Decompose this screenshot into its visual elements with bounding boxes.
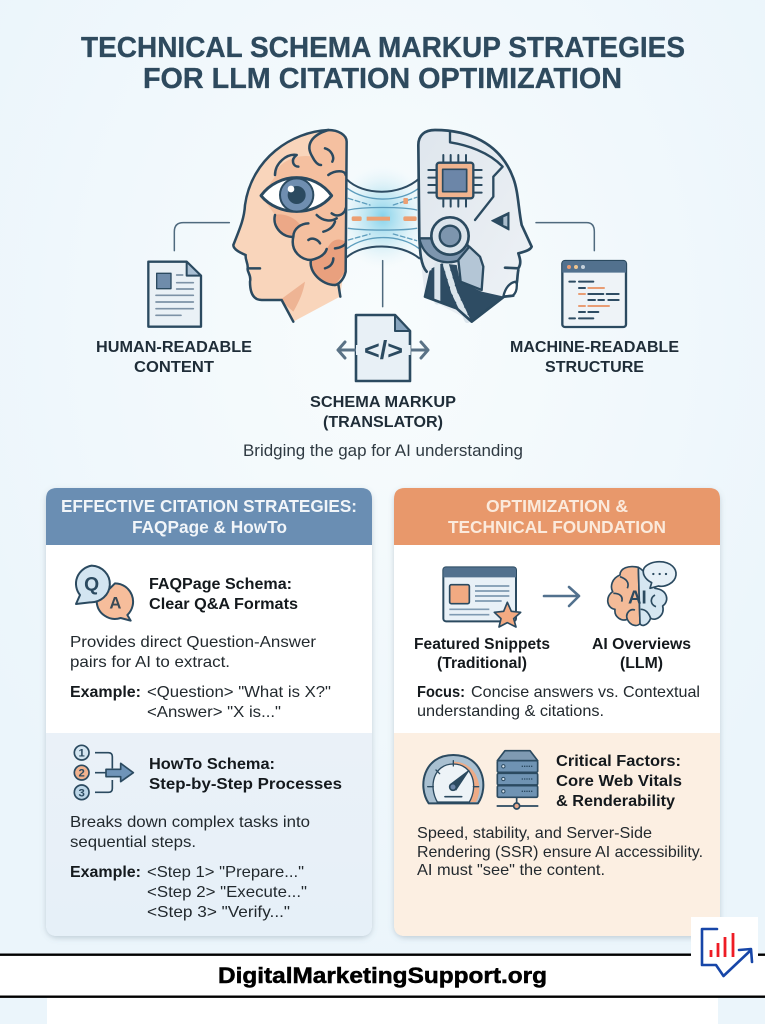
focus note: Focus: (417, 684, 465, 701)
icon: schema translator document (338, 315, 428, 381)
title: FOR LLM CITATION OPTIMIZATION (143, 63, 622, 95)
FAQPage example (70, 684, 331, 721)
title: TECHNICAL SCHEMA MARKUP STRATEGIES (81, 32, 685, 64)
icon: code browser window (562, 261, 626, 327)
comparison labels: AI Overviews (592, 636, 691, 653)
label: schema markup translator: SCHEMA MARKUP (310, 394, 456, 411)
human head (233, 130, 347, 322)
FAQPage example: Example: (70, 684, 141, 701)
comparison labels: Featured Snippets (414, 636, 550, 653)
focus note: understanding & citations. (417, 703, 604, 720)
panel header: citation strategies: FAQPage & HowTo (132, 517, 287, 537)
label: human-readable content (96, 339, 252, 376)
FAQPage example: <Question> "What is X?" (147, 684, 331, 701)
icon: numbered steps to arrow: 1 (79, 748, 85, 760)
FAQPage description: Provides direct Question-Answer (70, 634, 317, 651)
icon: numbered steps to arrow (74, 745, 133, 800)
HowTo example: <Step 2> "Execute..." (147, 884, 307, 901)
critical factors description (417, 825, 703, 879)
panel header: citation strategies (46, 488, 372, 545)
HowTo description: Breaks down complex tasks into (70, 814, 310, 831)
critical factors description: Rendering (SSR) ensure AI accessibility. (417, 844, 703, 861)
FAQPage description: pairs for AI to extract. (70, 654, 230, 671)
icon: AI brain with speech bubble: AI (628, 586, 647, 607)
focus note (417, 684, 700, 720)
arrow: snippets to overviews (544, 587, 579, 606)
label: schema markup translator (310, 394, 456, 431)
icon: Q and A speech bubbles (76, 566, 133, 621)
icon: numbered steps to arrow: 3 (79, 787, 85, 799)
icon: AI brain with speech bubble (608, 562, 676, 625)
label: machine-readable structure (510, 339, 679, 376)
sub-panel: howto background (46, 733, 372, 936)
icon: speed gauge (423, 755, 483, 803)
footer band (0, 954, 765, 998)
panel header: citation strategies: EFFECTIVE CITATION STRATEGIES: (61, 496, 357, 516)
panel header: optimization: OPTIMIZATION & (486, 496, 628, 516)
HowTo description (70, 814, 310, 851)
critical factors description: Speed, stability, and Server-Side (417, 825, 652, 842)
critical factors heading: Critical Factors: (556, 753, 681, 770)
data bridge between heads (336, 165, 429, 268)
logo (691, 917, 758, 980)
bottom white panel (47, 997, 718, 1024)
icon: Q and A speech bubbles: Q (84, 575, 99, 596)
icon: server stack (497, 751, 538, 809)
label: machine-readable structure: MACHINE-READABLE (510, 339, 679, 356)
panel header: optimization: TECHNICAL FOUNDATION (448, 517, 666, 537)
sub-panel: critical factors background (394, 733, 720, 936)
icon: numbered steps to arrow: 2 (79, 768, 85, 780)
critical factors heading (556, 753, 682, 810)
footer band: DigitalMarketingSupport.org (218, 963, 547, 988)
label: human-readable content: CONTENT (134, 359, 214, 376)
panel: optimization and technical foundation (394, 488, 720, 936)
hero illustration: human and robot heads (148, 130, 626, 327)
FAQPage example: <Answer> "X is..." (147, 704, 281, 721)
icon: Q and A speech bubbles: A (109, 593, 121, 612)
connector lines (174, 223, 594, 307)
critical factors heading: & Renderability (556, 793, 675, 810)
HowTo heading: HowTo Schema: (149, 756, 275, 773)
robot head (418, 130, 532, 322)
icon: schema translator document: </> (364, 335, 403, 365)
comparison labels (414, 636, 691, 672)
HowTo example: <Step 1> "Prepare..." (147, 864, 304, 881)
panel: effective citation strategies (46, 488, 372, 936)
FAQPage description (70, 634, 317, 671)
critical factors heading: Core Web Vitals (556, 773, 682, 790)
tagline: Bridging the gap for AI understanding (243, 442, 523, 460)
label: machine-readable structure: STRUCTURE (545, 359, 644, 376)
icon: document (148, 262, 201, 327)
label: human-readable content: HUMAN-READABLE (96, 339, 252, 356)
HowTo example: <Step 3> "Verify..." (147, 904, 290, 921)
FAQPage heading (149, 576, 298, 613)
HowTo heading (149, 756, 342, 793)
critical factors description: AI must "see" the content. (417, 862, 605, 879)
panel header: optimization (394, 488, 720, 545)
HowTo heading: Step-by-Step Processes (149, 776, 342, 793)
FAQPage heading: Clear Q&A Formats (149, 596, 298, 613)
HowTo description: sequential steps. (70, 834, 196, 851)
title (81, 32, 685, 95)
HowTo example: Example: (70, 864, 141, 881)
label: schema markup translator: (TRANSLATOR) (323, 414, 443, 431)
comparison labels: (Traditional) (437, 655, 527, 672)
comparison labels: (LLM) (620, 655, 663, 672)
HowTo example (70, 864, 307, 921)
icon: featured snippet browser (443, 567, 521, 627)
focus note: Concise answers vs. Contextual (471, 684, 700, 701)
FAQPage heading: FAQPage Schema: (149, 576, 292, 593)
